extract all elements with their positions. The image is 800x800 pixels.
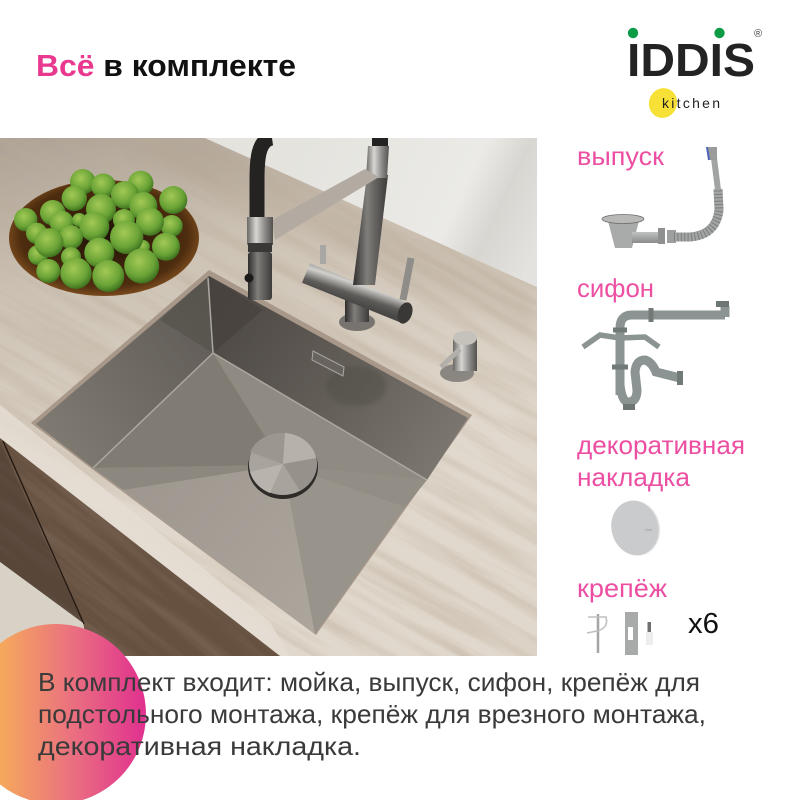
label: декоративная накладка: [577, 430, 745, 492]
cabinet front: [0, 438, 280, 656]
soap dispenser: [440, 331, 477, 382]
logo: IDDIS kitchen: ®: [754, 28, 762, 40]
label: декоративная накладка: декоративная: [577, 430, 745, 460]
wall reflection of drain: [329, 368, 385, 405]
title: Всё в комплекте: [36, 48, 296, 83]
wall: [205, 138, 537, 287]
icon: decorative cover: iddis: [645, 528, 652, 532]
photo: kitchen sink: [0, 138, 537, 656]
panel: included parts: [577, 141, 745, 655]
label: сифон: сифон: [577, 273, 654, 303]
countertop: [0, 138, 537, 656]
logo: IDDIS kitchen: [627, 28, 762, 122]
left wall of basin: [36, 276, 213, 468]
overflow plate: [312, 351, 344, 376]
text block: contents description: [38, 667, 706, 761]
label: x6: x6: [688, 608, 719, 640]
basin creases: [93, 278, 427, 480]
icon: fasteners: [587, 612, 653, 655]
text block: contents description: В комплект входит: мойка, выпуск, сифон, крепёж для: [38, 667, 700, 697]
icon: decorative cover: [605, 495, 666, 561]
icon: siphon: [583, 304, 729, 407]
logo: IDDIS kitchen: IDDIS: [627, 34, 755, 86]
sink basin: [31, 270, 472, 635]
drain cover: [248, 433, 318, 499]
text block: contents description: декоративная накладка.: [38, 731, 361, 761]
logo: IDDIS kitchen: kitchen: [662, 95, 720, 111]
icon: waste outlet: [602, 147, 719, 248]
text block: contents description: подстольного монтажа, крепёж для врезного монтажа,: [38, 699, 706, 729]
gradient circle: [0, 624, 146, 800]
basin floor facets: [94, 354, 265, 468]
faucet: [244, 138, 415, 331]
label: декоративная накладка: накладка: [577, 462, 691, 492]
label: выпуск: выпуск: [577, 141, 665, 171]
bowl of fruit: [9, 169, 199, 296]
label: крепёж: крепёж: [577, 573, 668, 603]
back wall of basin: [209, 276, 468, 480]
